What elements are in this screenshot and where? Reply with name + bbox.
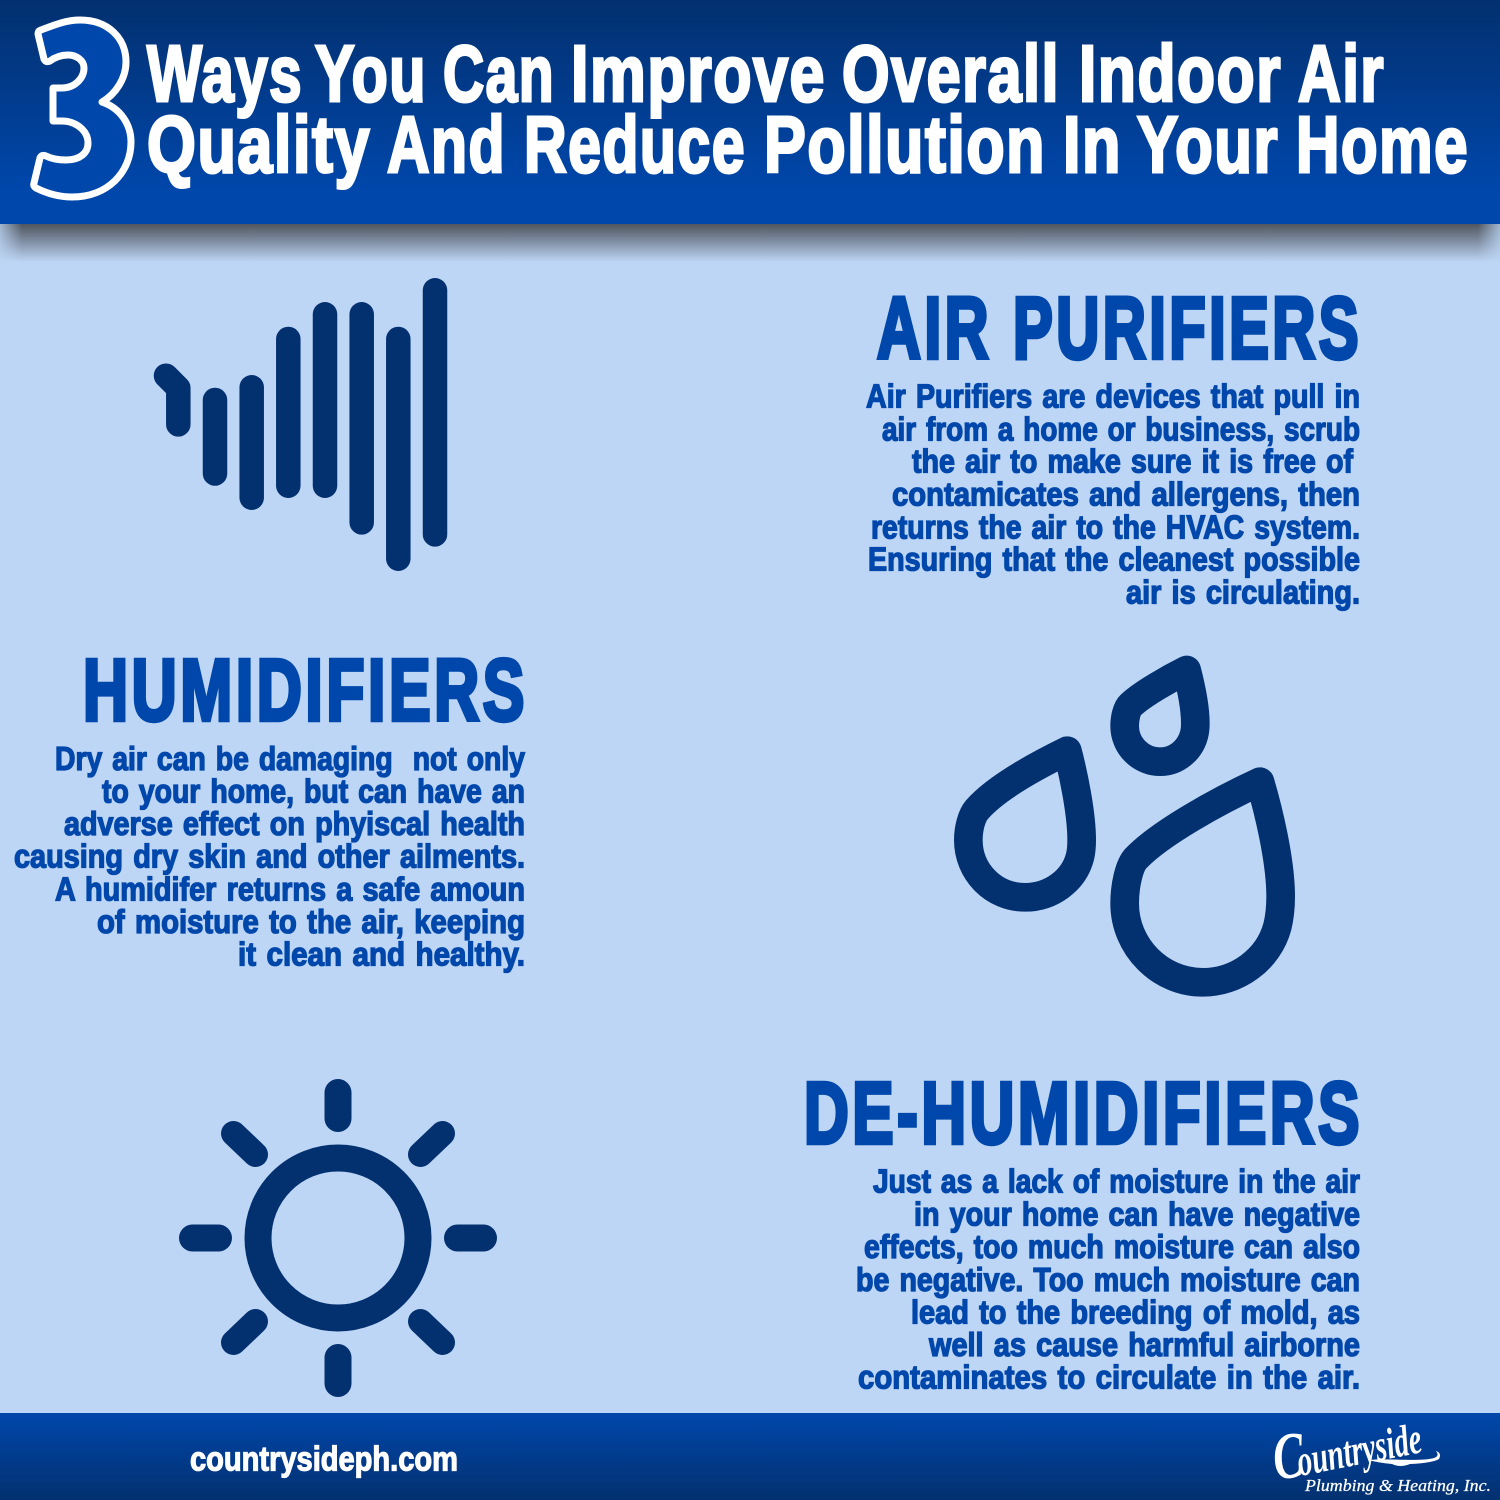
title: Can xyxy=(443,29,555,118)
title: Quality xyxy=(147,100,371,189)
text block: de-humidifiers description xyxy=(856,1162,1360,1396)
text block: air purifiers description xyxy=(866,378,1360,610)
text block: humidifiers description: adverse effect on phyiscal health xyxy=(64,805,525,842)
text block: humidifiers description: it clean and healthy. xyxy=(238,936,525,972)
text block: humidifiers description: to your home, but can have an xyxy=(102,772,525,810)
title: Indoor xyxy=(1079,29,1282,118)
title: You xyxy=(315,29,427,118)
panel: humidifiers xyxy=(14,642,528,972)
heading: air purifiers xyxy=(877,280,1362,377)
text block: de-humidifiers description: be negative. Too much moisture can xyxy=(856,1261,1360,1298)
logo: countryside plumbing and heating: ountryside xyxy=(1293,1414,1426,1486)
panel: air purifiers xyxy=(866,280,1362,610)
title xyxy=(147,29,1469,189)
title: Pollution xyxy=(764,100,1046,189)
logo: countryside plumbing and heating: C xyxy=(1270,1419,1307,1494)
text block: de-humidifiers description: Just as a lack of moisture in the air xyxy=(873,1162,1360,1200)
website url: countrysideph.com xyxy=(190,1440,458,1478)
panel: de-humidifiers xyxy=(804,1065,1363,1396)
title: Your xyxy=(1137,100,1279,189)
title: In xyxy=(1063,100,1122,189)
header banner xyxy=(0,0,1500,224)
header shadow xyxy=(0,224,1500,262)
text block: air purifiers description: Ensuring that the cleanest possible xyxy=(868,540,1360,578)
text block: air purifiers description: air from a home or business, scrub xyxy=(882,410,1360,448)
text block: air purifiers description: contamicates and allergens, then xyxy=(892,476,1360,512)
icon: water drops xyxy=(968,670,1281,982)
title: Ways xyxy=(147,29,303,118)
footer bar xyxy=(0,1413,1500,1500)
text block: air purifiers description: Air Purifiers are devices that pull in xyxy=(866,378,1360,414)
text block: humidifiers description: of moisture to the air, keeping xyxy=(97,903,525,940)
text block: humidifiers description xyxy=(14,740,526,972)
text block: air purifiers description: air is circulating. xyxy=(1126,574,1360,610)
logo: countryside plumbing and heating xyxy=(1270,1414,1491,1495)
text block: de-humidifiers description: well as cause harmful airborne xyxy=(928,1326,1360,1363)
heading: humidifiers: HUMIDIFIERS xyxy=(83,642,528,739)
text block: de-humidifiers description: contaminates to circulate in the air. xyxy=(858,1358,1360,1396)
text block: de-humidifiers description: effects, too much moisture can also xyxy=(864,1228,1360,1265)
title: Air xyxy=(1298,29,1385,118)
title: And xyxy=(387,100,506,189)
text block: air purifiers description: the air to make sure it is free of xyxy=(912,442,1354,480)
title: Overall xyxy=(842,29,1060,118)
title: Improve xyxy=(571,29,826,118)
icon: sun xyxy=(192,1092,484,1384)
logo: countryside plumbing and heating: Plumbing & Heating, Inc. xyxy=(1304,1476,1491,1495)
text block: de-humidifiers description: lead to the breeding of mold, as xyxy=(911,1294,1360,1330)
text block: humidifiers description: causing dry skin and other ailments. xyxy=(14,838,525,874)
text block: air purifiers description: returns the air to the HVAC system. xyxy=(871,508,1360,546)
text block: de-humidifiers description: in your home can have negative xyxy=(914,1196,1360,1232)
text block: humidifiers description: Dry air can be damaging not only xyxy=(55,740,526,777)
title: Reduce xyxy=(524,100,746,189)
icon: air vent bars xyxy=(166,290,435,559)
heading: air purifiers: AIR xyxy=(877,280,992,377)
big numeral 3 xyxy=(34,20,131,197)
text block: humidifiers description: A humidifer returns a safe amoun xyxy=(55,870,525,908)
